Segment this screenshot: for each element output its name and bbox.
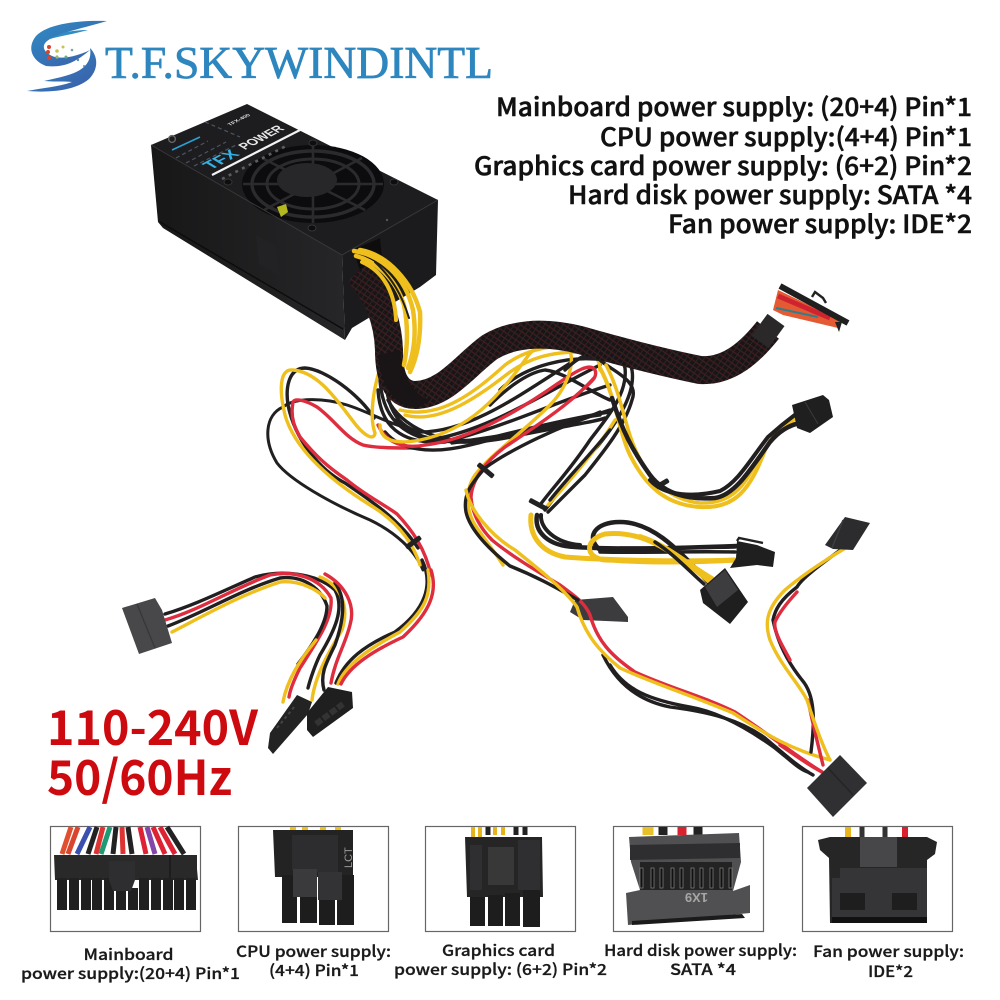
label: TFX POWER	[169, 113, 300, 179]
caption: CPU: (4+4) Pin*1	[269, 959, 359, 981]
caption: hard disk: SATA *4	[670, 958, 736, 980]
branch to Molex	[312, 577, 345, 700]
specification list: Hard disk power supply: SATA *4	[568, 176, 972, 212]
lower 8 pin plug	[700, 568, 748, 624]
cable outlet	[353, 238, 382, 270]
Molex plug 1	[268, 695, 312, 754]
PSU body	[151, 104, 438, 340]
Molex plug 2	[307, 687, 353, 737]
vent recess	[256, 235, 279, 275]
green fan sticker	[277, 204, 288, 217]
label: TFX POWER: POWER	[235, 123, 287, 151]
right fan/molex harness	[767, 517, 870, 817]
specification list: Graphics card power supply: (6+2) Pin*2	[474, 147, 972, 183]
caption: fan: IDE*2	[868, 960, 913, 982]
connector	[792, 395, 833, 433]
feed wires	[336, 560, 427, 683]
caption: graphics card	[394, 939, 607, 980]
caption: CPU: CPU power supply:	[236, 940, 391, 962]
big Molex	[807, 755, 867, 817]
icon: swoosh logo	[27, 21, 107, 92]
specification list: Mainboard power supply: (20+4) Pin*1	[496, 88, 972, 124]
left SATA + Molex harness	[122, 560, 433, 754]
caption: mainboard: Mainboard	[84, 943, 174, 965]
top face	[151, 104, 438, 255]
caption: CPU	[236, 940, 391, 981]
connector wires	[62, 827, 184, 854]
brand name: T.F.SKYWINDINTL	[105, 38, 493, 88]
voltage callout: 50/60Hz	[47, 739, 232, 809]
screws	[224, 140, 398, 231]
center 6+2 harness	[531, 515, 775, 624]
SATA plug	[122, 598, 172, 654]
panel: mainboard connector	[50, 826, 200, 932]
mold mark: LCT	[343, 847, 355, 868]
panel: CPU connector	[238, 826, 388, 932]
label: TFX POWER: TFX-400	[227, 113, 252, 127]
fan	[242, 145, 384, 223]
left loop cables	[268, 368, 431, 575]
small Molex	[825, 517, 870, 550]
latch	[109, 861, 135, 891]
6 pin side plug	[730, 541, 775, 568]
specification list: CPU power supply:(4+4) Pin*1	[600, 118, 972, 154]
heat shrink end	[760, 320, 776, 342]
caption: fan	[813, 940, 964, 982]
sleeved main cable	[358, 272, 776, 408]
panel: IDE connector	[802, 826, 952, 932]
6+2 pin cable, top	[600, 365, 833, 507]
caption: hard disk: Hard disk power supply:	[604, 939, 797, 961]
top yellow loom at PSU	[354, 250, 420, 372]
panel: SATA connector	[614, 826, 764, 932]
front face	[151, 145, 345, 340]
bottom edge highlight	[151, 145, 438, 255]
motherboard connector	[773, 286, 848, 332]
caption: mainboard: power supply:(20+4) Pin*1	[21, 962, 240, 984]
right face	[342, 200, 438, 340]
mold mark: 1X9	[685, 890, 708, 905]
loom tie	[528, 498, 548, 511]
caption: hard disk	[604, 939, 797, 980]
specification list: Fan power supply: IDE*2	[668, 205, 972, 241]
specification list	[474, 88, 972, 241]
panel: graphics card connector	[426, 826, 576, 932]
black bundle and zip	[405, 349, 670, 550]
front loom wires	[378, 339, 830, 775]
label: TFX POWER: TFX	[198, 147, 244, 172]
voltage callout: 110-240V	[47, 689, 258, 759]
caption: graphics card: power supply: (6+2) Pin*2	[394, 958, 607, 980]
SATA plug mid	[570, 597, 628, 622]
logo: T.F.SKYWINDINTL	[27, 21, 493, 92]
voltage callout	[47, 689, 258, 809]
caption: mainboard	[21, 943, 240, 984]
caption: graphics card: Graphics card	[442, 939, 555, 961]
cables behind sleeve	[378, 346, 610, 443]
branch to SATA	[165, 573, 339, 688]
caption: fan: Fan power supply:	[813, 940, 964, 962]
